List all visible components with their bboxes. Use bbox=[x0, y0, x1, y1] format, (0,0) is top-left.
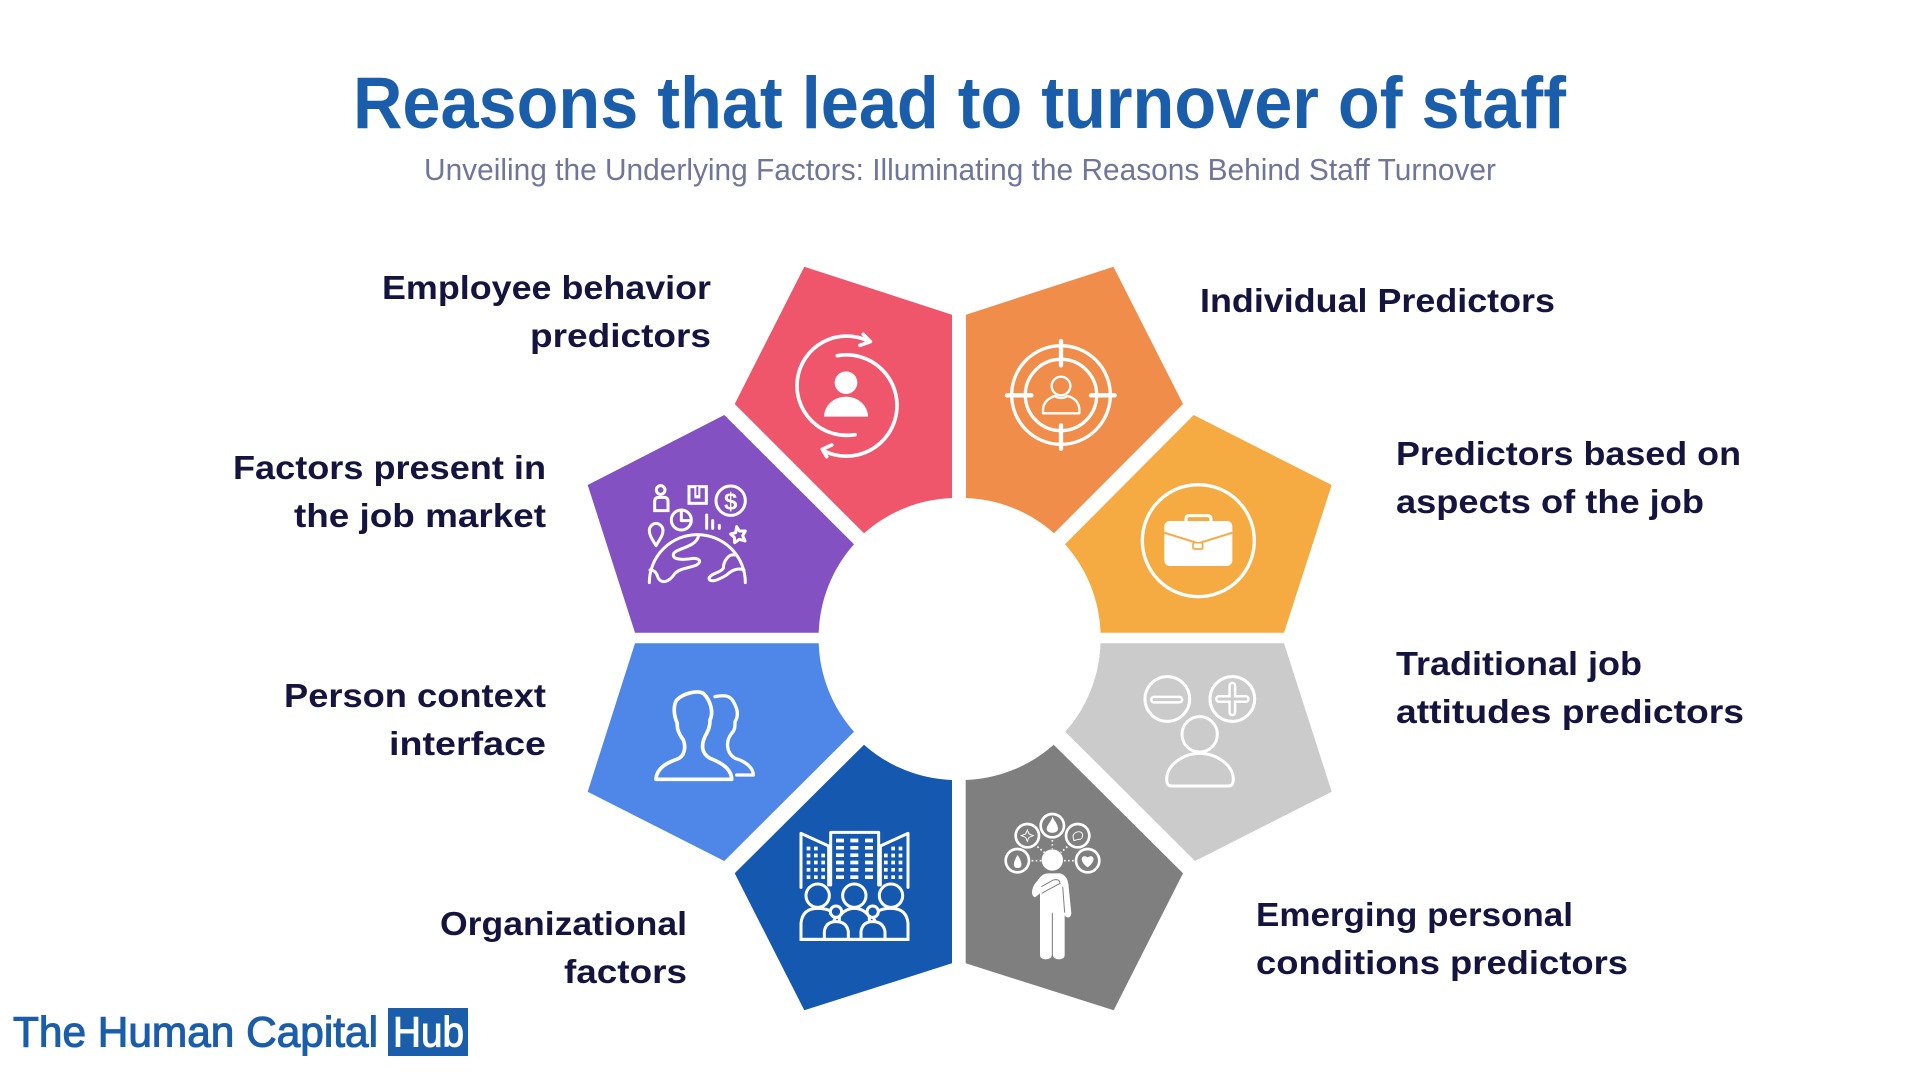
label: factors present in the job market: Factors present in bbox=[233, 449, 546, 486]
panel: organizational factors segment bbox=[735, 745, 952, 1010]
label: factors present in the job market bbox=[233, 449, 546, 534]
logo: The Human Capital Hub: The Human Capital bbox=[13, 1008, 378, 1056]
icon: globe with market symbols bbox=[649, 486, 745, 583]
label: person context interface: Person context bbox=[284, 677, 546, 714]
icon: person with emotion bubbles bbox=[1006, 814, 1099, 959]
label: person context interface: interface bbox=[389, 725, 546, 762]
panel: individual predictors segment bbox=[966, 267, 1183, 533]
icon: briefcase in circle bbox=[1142, 485, 1254, 597]
icon: person with rotating arrows bbox=[797, 334, 897, 457]
label: predictors based on aspects of the job: Predictors based on bbox=[1396, 435, 1741, 472]
label: employee behavior predictors: predictors bbox=[530, 317, 711, 354]
label: emerging personal conditions predictors: conditions predictors bbox=[1256, 944, 1628, 981]
label: predictors based on aspects of the job bbox=[1396, 435, 1741, 520]
title: Reasons that lead to turnover of staff bbox=[353, 63, 1567, 144]
panel: job market factors segment bbox=[588, 415, 854, 633]
panel: aspects of the job segment bbox=[1065, 415, 1332, 633]
label: individual predictors: Individual Predictors bbox=[1200, 282, 1555, 319]
label: organizational factors: factors bbox=[564, 953, 687, 990]
panel: person context interface segment bbox=[588, 643, 854, 861]
logo: The Human Capital Hub: Hub bbox=[393, 1008, 464, 1056]
panel: traditional job attitudes segment bbox=[1065, 643, 1332, 861]
label: predictors based on aspects of the job: aspects of the job bbox=[1396, 483, 1704, 520]
icon: two head silhouettes bbox=[656, 692, 753, 779]
label: factors present in the job market: the job market bbox=[294, 497, 546, 534]
icon: globe with market symbols: $ bbox=[724, 488, 737, 515]
icon: buildings and people bbox=[801, 832, 908, 939]
label: organizational factors: Organizational bbox=[440, 905, 687, 942]
label: emerging personal conditions predictors bbox=[1256, 896, 1628, 981]
icon: person with minus and plus bbox=[1145, 677, 1255, 786]
subtitle: Unveiling the Underlying Factors: Illuminating the Reasons Behind Staff Turnover bbox=[424, 152, 1496, 187]
label: organizational factors bbox=[440, 905, 687, 990]
label: traditional job attitudes predictors: attitudes predictors bbox=[1396, 693, 1744, 730]
panel: emerging personal conditions segment bbox=[966, 745, 1183, 1010]
label: employee behavior predictors bbox=[382, 269, 711, 354]
label: traditional job attitudes predictors bbox=[1396, 645, 1744, 730]
label: emerging personal conditions predictors: Emerging personal bbox=[1256, 896, 1573, 933]
label: traditional job attitudes predictors: Traditional job bbox=[1396, 645, 1642, 682]
label: person context interface bbox=[284, 677, 546, 762]
icon: target with person bbox=[1007, 341, 1115, 449]
panel: employee behavior predictors segment bbox=[735, 267, 952, 533]
label: employee behavior predictors: Employee behavior bbox=[382, 269, 711, 306]
